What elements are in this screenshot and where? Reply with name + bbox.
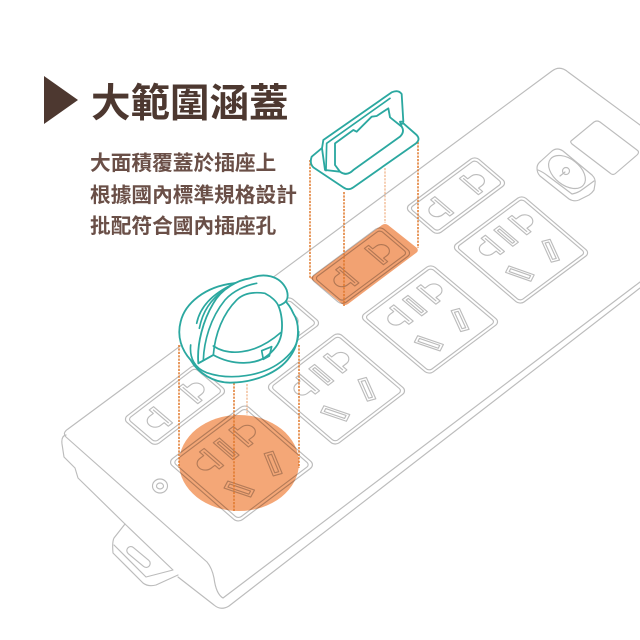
power strip body outline — [62, 68, 640, 608]
socket: two-hole top — [405, 156, 507, 235]
socket: three-hole top — [452, 195, 590, 305]
socket: three-hole under orange circle — [168, 404, 315, 523]
socket: three-hole second — [360, 264, 500, 375]
dotted projection lines: round cover — [179, 345, 299, 511]
body text: 大面積覆蓋於插座上 — [90, 151, 276, 175]
power switch — [537, 149, 595, 201]
socket: two-hole lower left — [123, 364, 227, 446]
socket: three-hole third — [266, 332, 407, 446]
orange circular coverage area — [179, 415, 299, 511]
indicator light — [152, 479, 168, 493]
body text — [90, 151, 297, 238]
orange rectangular coverage area — [310, 224, 418, 305]
socket: two-hole under rectangular cover — [310, 226, 412, 305]
label plate — [571, 121, 638, 174]
dotted projection lines: rectangular cover — [310, 142, 418, 306]
socket: two-hole under round cover — [217, 296, 321, 376]
round socket cover — [179, 276, 299, 383]
title: 大範圍涵蓋 — [91, 82, 288, 126]
mounting ear tab — [113, 524, 178, 586]
title arrow — [44, 76, 78, 124]
body text: 根據國內標準規格設計 — [90, 183, 297, 207]
body text: 批配符合國內插座孔 — [90, 214, 277, 238]
rectangular socket cover — [311, 91, 419, 189]
